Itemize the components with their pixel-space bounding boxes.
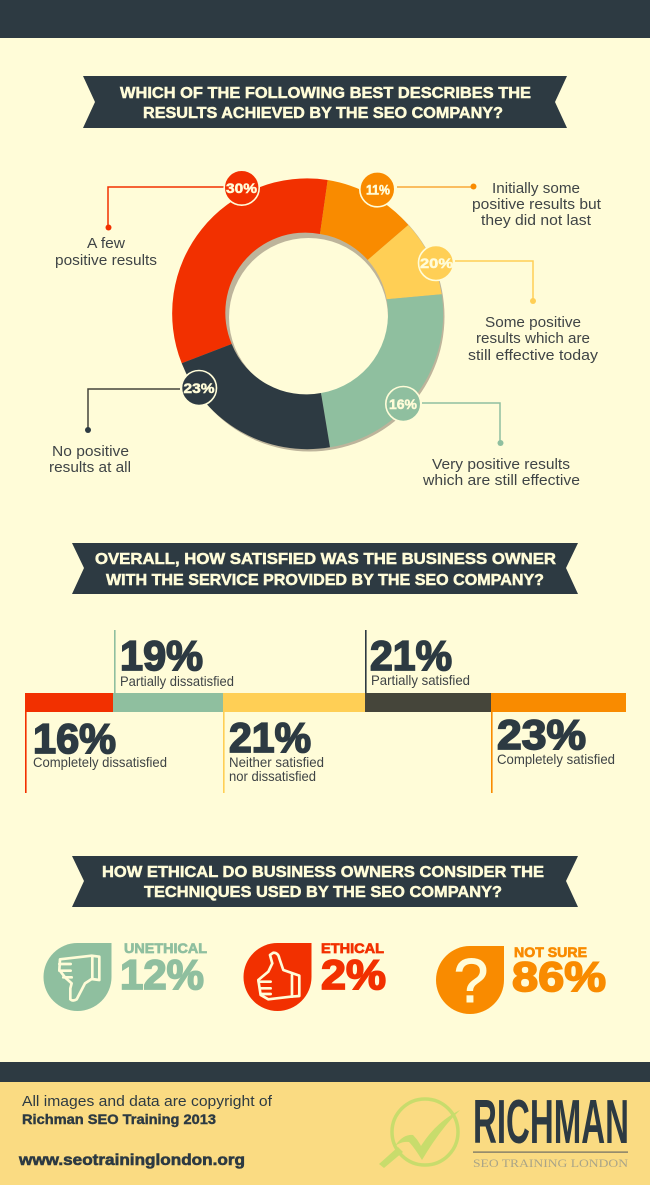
stat: unethical 12%: 12% xyxy=(120,951,204,998)
callout: initially some positive results: Initially some xyxy=(492,180,580,197)
callout: very positive results: 16% xyxy=(389,396,418,412)
copyright text: All images and data are copyright of xyxy=(22,1093,273,1110)
stat: unethical 12%: UNETHICAL xyxy=(124,940,207,956)
callout: some positive results still effective: still effective today xyxy=(468,347,599,364)
heading: results banner xyxy=(83,76,567,128)
stat: 16% completely dissatisfied: Completely dissatisfied xyxy=(33,754,167,770)
heading: satisfaction banner: WITH THE SERVICE PROVIDED BY THE SEO COMPANY? xyxy=(106,572,544,589)
heading: ethics banner: HOW ETHICAL DO BUSINESS OWNERS CONSIDER THE xyxy=(102,864,544,881)
logo icon: magnifier with check xyxy=(379,1099,460,1168)
callout: some positive results still effective: Some positive xyxy=(485,314,581,331)
stat: 21% neither: nor dissatisfied xyxy=(229,768,316,784)
callout: very positive results: Very positive results xyxy=(432,456,570,473)
callout: a few positive results: A few xyxy=(87,235,125,252)
heading: results banner: RESULTS ACHIEVED BY THE SEO COMPANY? xyxy=(143,105,503,122)
callout: initially some positive results: positive results but xyxy=(472,196,602,213)
callout: no positive results: results at all xyxy=(49,459,131,476)
stat: 23% completely satisfied: Completely satisfied xyxy=(497,751,615,767)
icon: question mark: ? xyxy=(454,947,488,1016)
website url: www.seotraininglondon.org xyxy=(18,1152,245,1169)
callout: no positive results: 23% xyxy=(184,380,215,396)
stat: 21% neither xyxy=(223,712,324,793)
donut chart: results achieved xyxy=(172,178,444,452)
callout: some positive results still effective xyxy=(418,246,599,364)
stacked bar: satisfaction xyxy=(25,693,626,712)
icon: thumbs up xyxy=(244,943,312,1011)
stat: 16% completely dissatisfied xyxy=(25,712,167,793)
callout: a few positive results: positive results xyxy=(55,252,157,269)
heading: ethics banner: TECHNIQUES USED BY THE SEO COMPANY? xyxy=(144,884,502,901)
top bar xyxy=(0,0,650,38)
copyright text xyxy=(22,1093,273,1127)
callout: very positive results: which are still effective xyxy=(422,472,580,489)
heading: ethics banner xyxy=(72,856,578,907)
heading: results banner: WHICH OF THE FOLLOWING BEST DESCRIBES THE xyxy=(120,85,531,102)
icon: thumbs down xyxy=(44,943,112,1011)
callout: no positive results xyxy=(49,370,216,476)
callout: some positive results still effective: results which are xyxy=(476,330,590,347)
stat: 19% partially dissatisfied: Partially dissatisfied xyxy=(120,673,234,689)
callout: some positive results still effective: 20% xyxy=(420,255,454,271)
callout: a few positive results xyxy=(55,170,259,269)
footer panel xyxy=(0,1082,650,1185)
callout: initially some positive results xyxy=(360,172,602,229)
callout: no positive results: No positive xyxy=(52,443,129,460)
footer bar xyxy=(0,1062,650,1082)
stat: 21% partially satisfied xyxy=(365,630,470,693)
stat: 19% partially dissatisfied xyxy=(114,630,234,693)
stat: 21% neither: 21% xyxy=(229,714,311,761)
stat: ethical 2%: ETHICAL xyxy=(321,940,384,956)
stat: 23% completely satisfied xyxy=(491,711,615,793)
stat: 19% partially dissatisfied: 19% xyxy=(120,632,203,679)
stat: not sure 86%: NOT SURE xyxy=(514,944,587,960)
heading: satisfaction banner xyxy=(72,543,578,594)
icon: question mark xyxy=(436,946,504,1016)
callout: very positive results xyxy=(386,386,580,489)
stat: 21% partially satisfied: Partially satisfied xyxy=(371,672,470,688)
heading: satisfaction banner: OVERALL, HOW SATISFIED WAS THE BUSINESS OWNER xyxy=(95,551,556,568)
stat: 16% completely dissatisfied: 16% xyxy=(33,715,116,762)
copyright text: Richman SEO Training 2013 xyxy=(22,1111,216,1127)
callout: initially some positive results: they did not last xyxy=(481,212,592,229)
callout: initially some positive results: 11% xyxy=(366,182,390,198)
stat: ethical 2%: 2% xyxy=(321,951,386,998)
logo wordmark: SEO TRAINING LONDON xyxy=(473,1156,628,1170)
stat: 21% neither: Neither satisfied xyxy=(229,754,324,770)
stat: not sure 86%: 86% xyxy=(512,953,606,1000)
stat: 23% completely satisfied: 23% xyxy=(497,711,586,758)
stat: 21% partially satisfied: 21% xyxy=(370,632,452,679)
callout: a few positive results: 30% xyxy=(226,180,258,196)
